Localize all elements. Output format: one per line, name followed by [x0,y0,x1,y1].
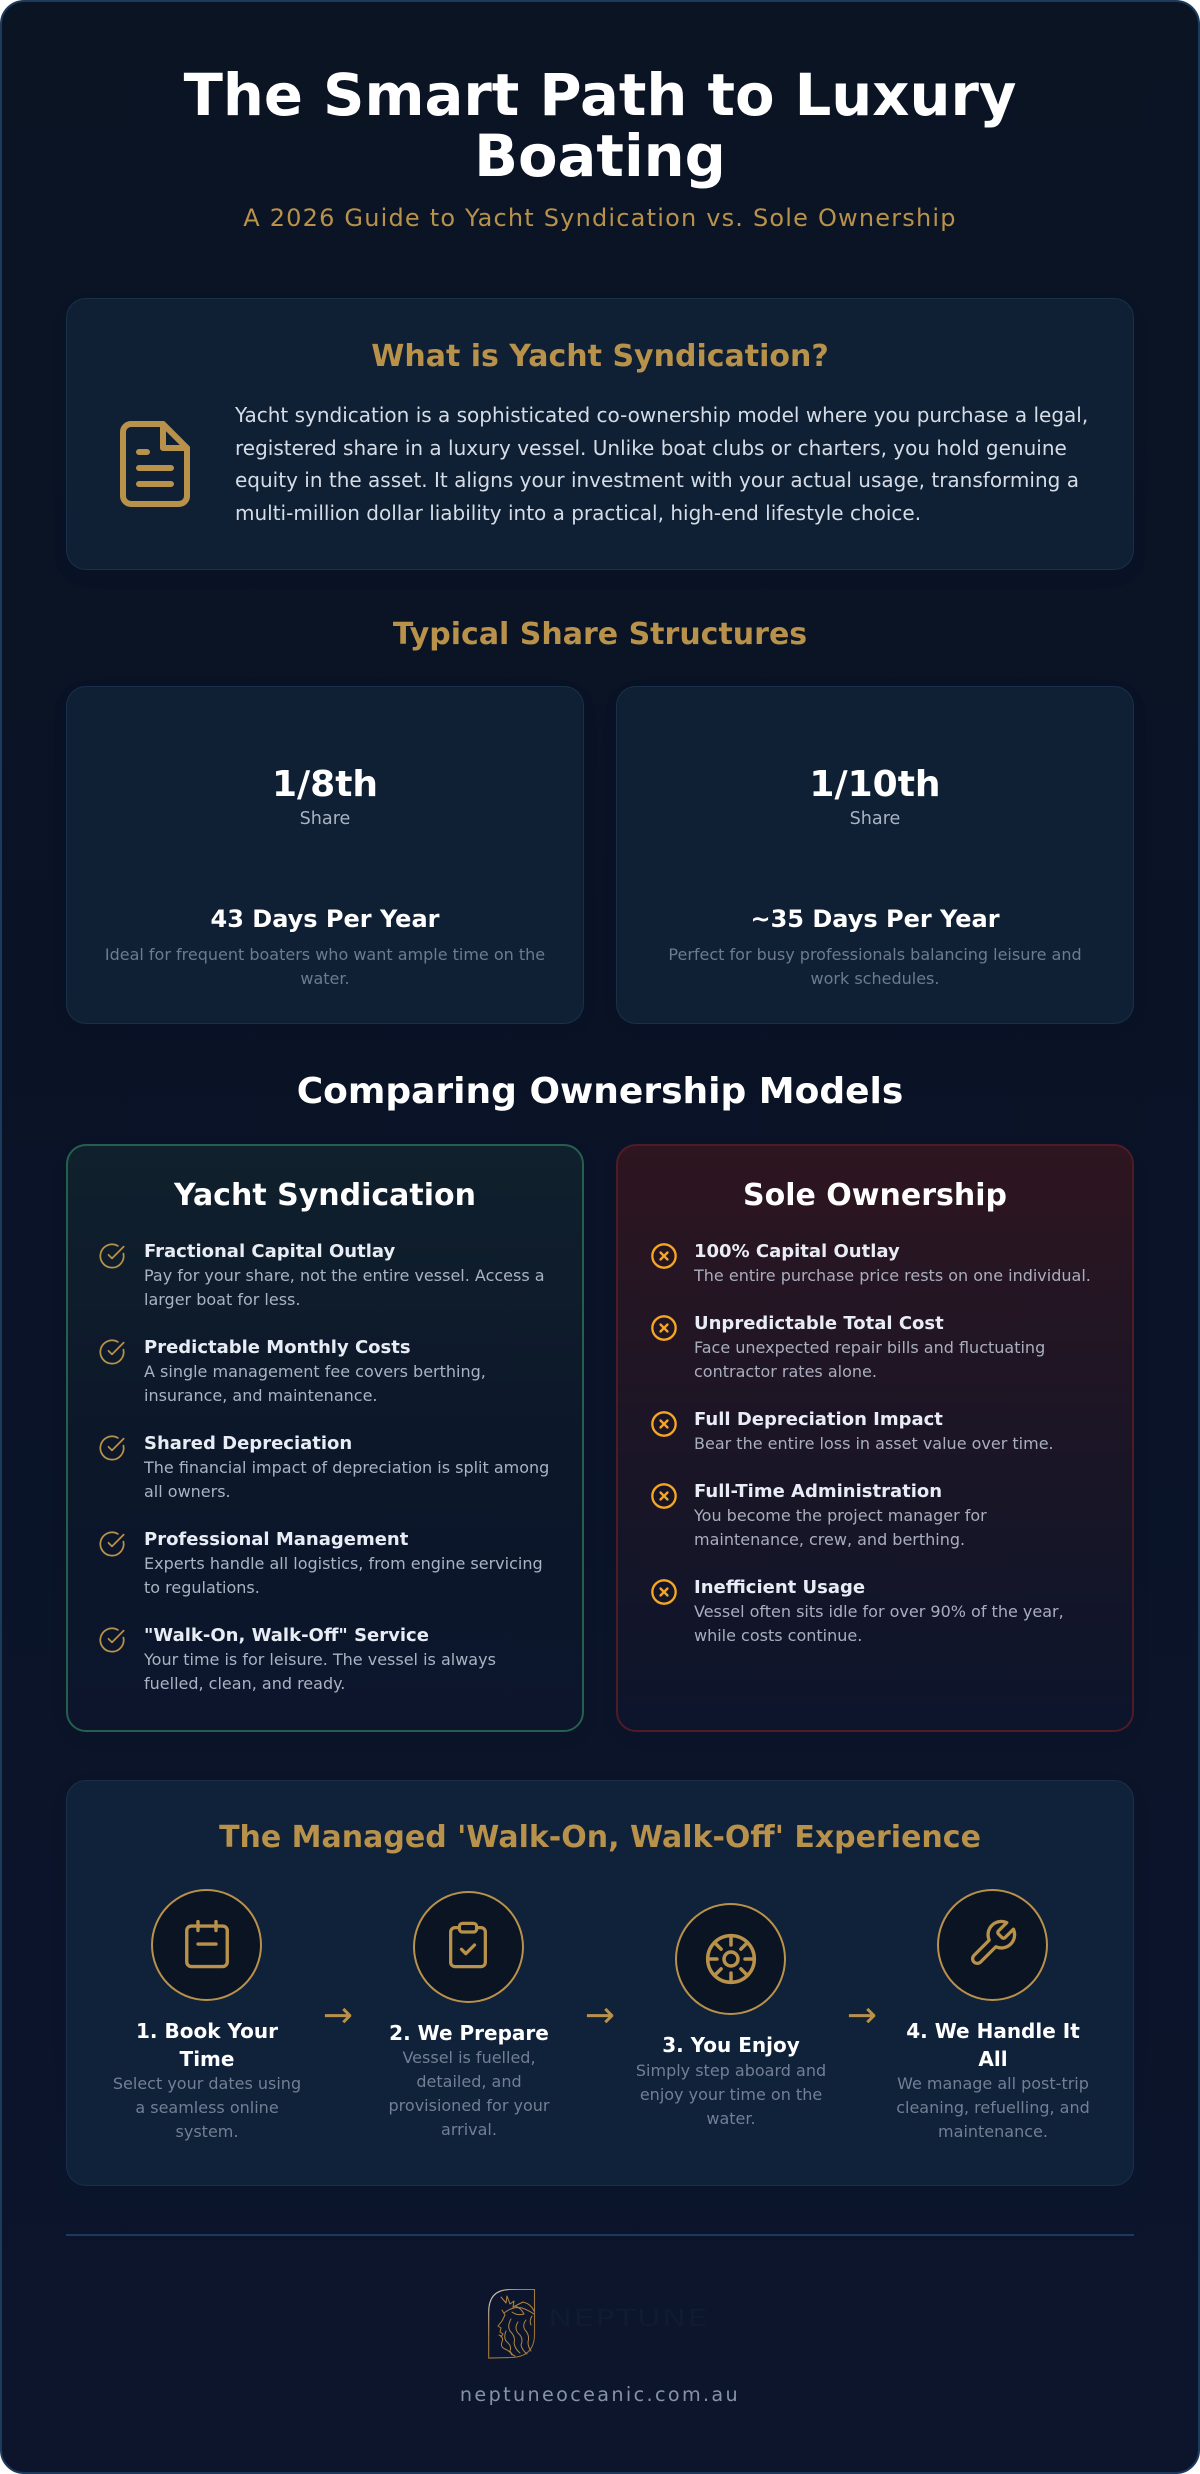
label: Time [180,2047,234,2071]
description: Simply step aboard and [636,2061,826,2080]
text [144,1241,545,1309]
list item 4 [651,1481,987,1549]
stat: 1/8th: 1/8th [272,764,378,805]
divider [66,2234,1134,2236]
panel: yacht syndication [66,1144,584,1732]
text [694,1481,987,1549]
step 1 [113,1889,301,2141]
text: Full Depreciation Impact [694,1409,943,1430]
list item 3 [99,1433,549,1501]
text: to regulations. [144,1578,260,1597]
check icon [99,1531,125,1556]
text: You become the project manager for [694,1506,987,1525]
list item 5 [99,1625,496,1693]
list item 1 [651,1241,1091,1285]
heading: Yacht Syndication [174,1178,476,1213]
description: maintenance. [938,2122,1048,2141]
step 3 [636,1903,826,2128]
panel: 1/8th share [66,686,584,1024]
label: All [978,2047,1008,2071]
panel: what is yacht syndication [66,298,1134,570]
description: water. [706,2109,756,2128]
text: contractor rates alone. [694,1362,877,1381]
label [136,2019,278,2071]
panel: managed experience [66,1780,1134,2186]
title: The Smart Path to Luxury Boating [184,62,1016,190]
text: while costs continue. [694,1626,862,1645]
text: A single management fee covers berthing, [144,1362,486,1381]
panel: sole ownership [616,1144,1134,1732]
text: 100% Capital Outlay [694,1241,900,1262]
subtitle: A 2026 Guide to Yacht Syndication vs. Sole Ownership [243,204,957,232]
text: Shared Depreciation [144,1433,352,1454]
text [694,1241,1091,1285]
label: share: Share [300,809,350,829]
label: 4. We Handle It [906,2019,1080,2043]
description: system. [176,2122,238,2141]
text: larger boat for less. [144,1290,300,1309]
text: Vessel often sits idle for over 90% of the year, [694,1602,1064,1621]
text block: definition: multi-million dollar liability into a practical, high-end lifestyle choice. [235,501,921,525]
list item 5 [651,1577,1064,1645]
icon: wheel [675,1903,786,2015]
description [631,2059,831,2131]
days: 35: ~35 Days Per Year [750,905,1000,933]
arrow 2: → [585,1995,615,2036]
text [694,1577,1064,1645]
x icon [651,1315,677,1341]
logo: neptune [486,2287,716,2360]
text [694,1409,1054,1453]
heading: comparing ownership models: Comparing Ownership Models [297,1071,903,1112]
text [144,1625,496,1693]
description: 1/10th: Perfect for busy professionals balancing leisure and [668,945,1082,964]
text: Professional Management [144,1529,408,1550]
text: all owners. [144,1482,231,1501]
days: 43: 43 Days Per Year [211,905,439,933]
x icon [651,1579,677,1605]
text: The entire purchase price rests on one individual. [694,1266,1091,1285]
step 4 [893,1889,1093,2149]
text: The financial impact of depreciation is split among [144,1458,549,1477]
text [144,1433,549,1501]
text: Bear the entire loss in asset value over time. [694,1434,1054,1453]
text: Inefficient Usage [694,1577,865,1598]
label: 3. You Enjoy [662,2033,800,2057]
description: Select your dates using [113,2074,301,2093]
check icon [99,1627,125,1652]
text block: definition: Yacht syndication is a sophisticated co-ownership model where you purchase a legal, [235,403,1088,427]
logo mark [486,2287,538,2360]
description: 1/10th: work schedules. [811,969,939,988]
text: Pay for your share, not the entire vessel. Access a [144,1266,545,1285]
description: 1/8th: Ideal for frequent boaters who want ample time on the [105,945,545,964]
list item 2 [651,1313,1045,1381]
icon: document [120,421,190,507]
description: arrival. [441,2120,497,2139]
text: Face unexpected repair bills and fluctuating [694,1338,1045,1357]
text: Predictable Monthly Costs [144,1337,411,1358]
arrow 1: → [323,1995,353,2036]
text block: definition [235,403,1088,525]
step 2 [389,1891,550,2139]
check icon [99,1339,125,1364]
text: maintenance, crew, and berthing. [694,1530,965,1549]
text [144,1529,543,1597]
description: 1/8th [105,945,545,988]
text [144,1337,486,1405]
heading: what is yacht syndication: What is Yacht Syndication? [371,339,829,374]
list item 2 [99,1337,486,1405]
icon: clipboard check [413,1891,524,2003]
label [893,2017,1093,2073]
icon: wrench [937,1889,1048,2001]
panel: 1/10th share [616,686,1134,1024]
x icon [651,1243,677,1269]
description: enjoy your time on the [640,2085,822,2104]
list item 4 [99,1529,543,1597]
arrow 3: → [847,1995,877,2036]
heading: typical share structures: Typical Share Structures [393,617,807,652]
description: cleaning, refuelling, and [896,2098,1090,2117]
text block: definition: registered share in a luxury vessel. Unlike boat clubs or charters, you hold genuine [235,436,1067,460]
icon: calendar [151,1889,262,2001]
text: Unpredictable Total Cost [694,1313,944,1334]
text block: definition: equity in the asset. It aligns your investment with your actual usage, transforming a [235,468,1079,492]
heading: Sole Ownership [743,1178,1007,1213]
website: neptuneoceanic.com.au [460,2383,740,2406]
text: Experts handle all logistics, from engine servicing [144,1554,543,1573]
description: Vessel is fuelled, [402,2048,536,2067]
text: Your time is for leisure. The vessel is always [144,1650,496,1669]
text [694,1313,1045,1381]
label: share: Share [850,809,900,829]
text: "Walk-On, Walk-Off" Service [144,1625,429,1646]
check icon [99,1435,125,1460]
check icon [99,1243,125,1268]
label: 1. Book Your [136,2019,278,2043]
text: insurance, and maintenance. [144,1386,378,1405]
description: a seamless online [135,2098,279,2117]
text: Fractional Capital Outlay [144,1241,395,1262]
logo wordmark: NEPTUNE [548,2306,709,2332]
stat: 1/10th: 1/10th [809,764,941,805]
list item 1 [99,1241,545,1309]
x icon [651,1411,677,1437]
description: We manage all post-trip [897,2074,1089,2093]
text: Full-Time Administration [694,1481,942,1502]
text: fuelled, clean, and ready. [144,1674,345,1693]
description [893,2072,1093,2144]
x icon [651,1483,677,1509]
description: detailed, and [416,2072,522,2091]
description [389,2048,550,2139]
description: 1/8th: water. [300,969,350,988]
description [113,2074,301,2141]
label: 2. We Prepare [389,2021,549,2045]
heading: managed experience: The Managed 'Walk-On, Walk-Off' Experience [219,1820,981,1855]
list item 3 [651,1409,1054,1453]
description: 1/10th [668,945,1082,988]
description: provisioned for your [389,2096,549,2115]
